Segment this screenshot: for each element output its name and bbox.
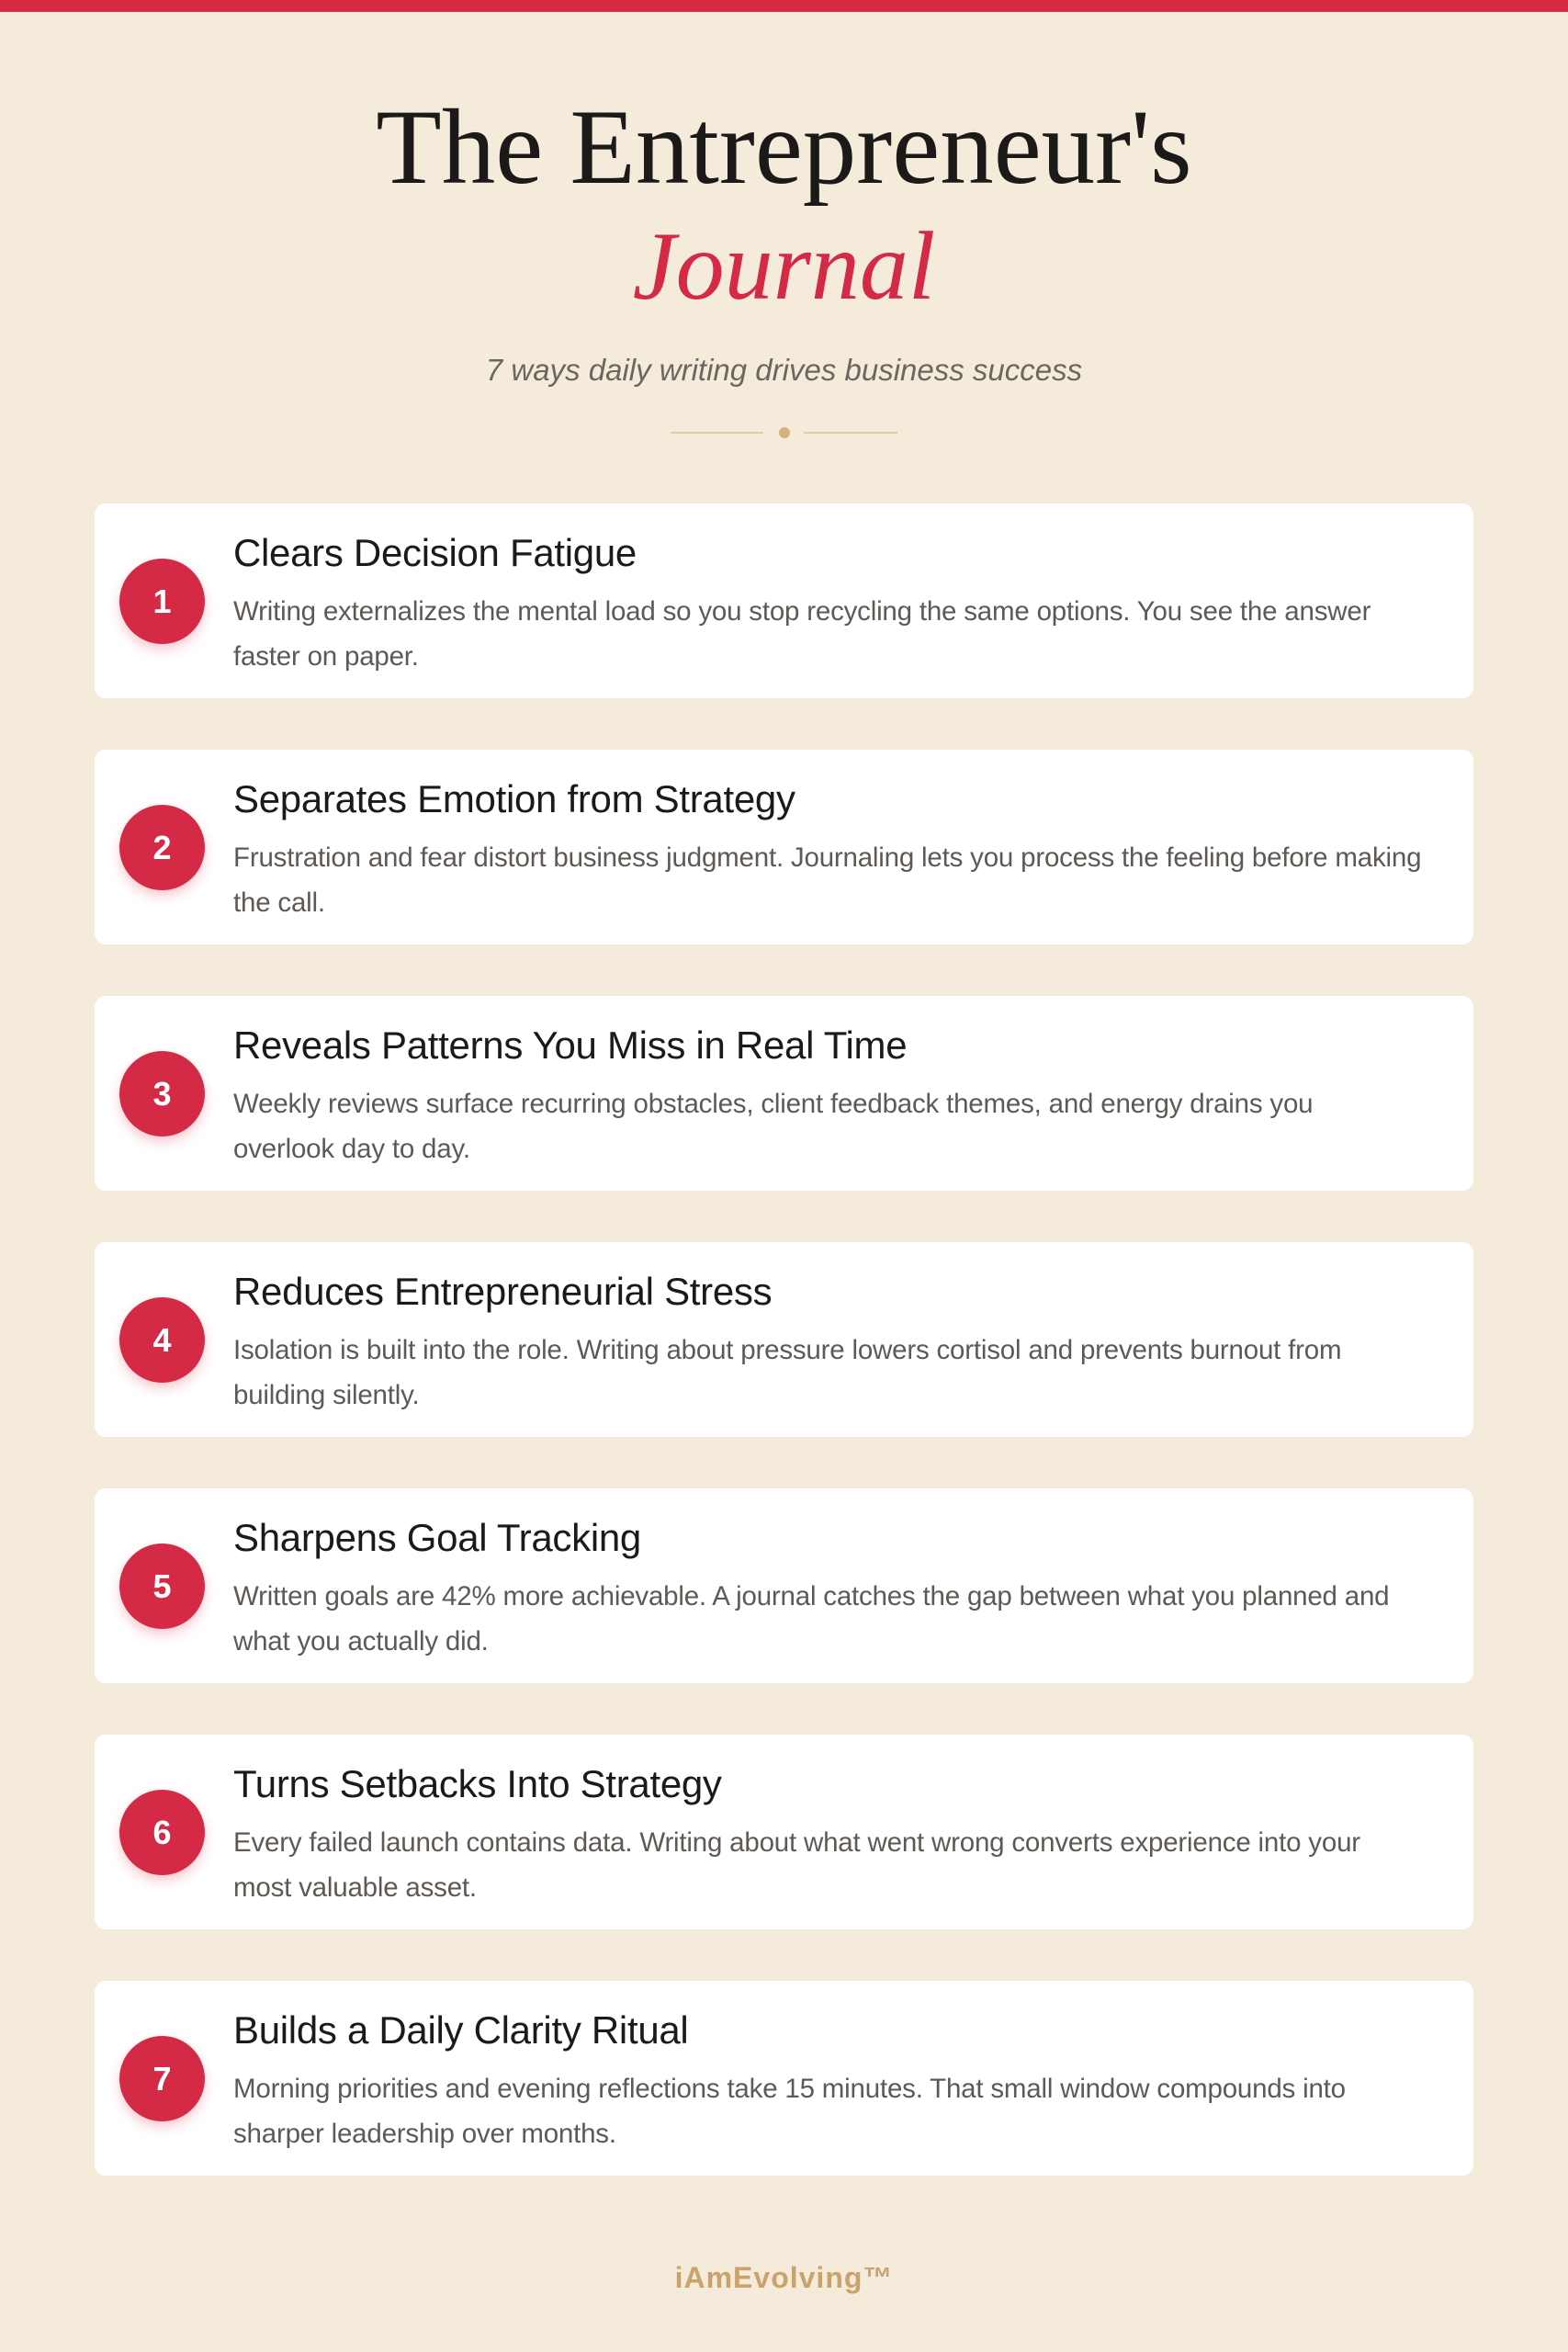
heading 5: Sharpens Goal Tracking: [233, 1516, 641, 1559]
text 5: Written goals are 42% more achievable. A journal catches the gap between what you planned and: [233, 1581, 1389, 1611]
text 2: the call.: [233, 888, 325, 918]
badge 6: [119, 1790, 205, 1875]
heading 7: Builds a Daily Clarity Ritual: [233, 2008, 688, 2052]
card 3: [95, 996, 1473, 1191]
heading 6: Turns Setbacks Into Strategy: [233, 1762, 722, 1805]
heading 1: Clears Decision Fatigue: [233, 531, 637, 574]
text 3: Weekly reviews surface recurring obstacles, client feedback themes, and energy drains you: [233, 1089, 1313, 1119]
badge 5: 5: [152, 1567, 172, 1605]
card 7: [95, 1981, 1473, 2176]
text 1: faster on paper.: [233, 641, 419, 672]
card 5: [95, 1488, 1473, 1683]
badge 5: [119, 1544, 205, 1629]
badge 2: 2: [152, 829, 172, 866]
text 7: sharper leadership over months.: [233, 2119, 616, 2149]
badge 4: [119, 1297, 205, 1383]
badge 6: 6: [152, 1814, 172, 1851]
text 4: Isolation is built into the role. Writing about pressure lowers cortisol and prevents burnout from: [233, 1335, 1341, 1365]
text 4: building silently.: [233, 1380, 419, 1410]
subtitle: 7 ways daily writing drives business success: [486, 353, 1082, 387]
badge 7: [119, 2036, 205, 2121]
badge 2: [119, 805, 205, 890]
heading 3: Reveals Patterns You Miss in Real Time: [233, 1023, 907, 1067]
text 2: [233, 842, 1421, 918]
text 5: what you actually did.: [233, 1626, 489, 1657]
card 4: [95, 1242, 1473, 1437]
badge 4: 4: [152, 1321, 172, 1359]
card 2: [95, 750, 1473, 944]
badge 1: 1: [152, 582, 172, 620]
badge 1: [119, 559, 205, 644]
text 7: [233, 2074, 1346, 2149]
heading 4: Reduces Entrepreneurial Stress: [233, 1270, 772, 1313]
text 3: [233, 1089, 1313, 1164]
text 2: Frustration and fear distort business judgment. Journaling lets you process the feeling before making: [233, 842, 1421, 873]
title: The Entrepreneur's: [376, 88, 1192, 207]
text 6: Every failed launch contains data. Writing about what went wrong converts experience into your: [233, 1827, 1360, 1858]
text 6: most valuable asset.: [233, 1872, 477, 1903]
text 4: [233, 1335, 1341, 1410]
text 1: [233, 596, 1371, 672]
text 7: Morning priorities and evening reflections take 15 minutes. That small window compounds into: [233, 2074, 1346, 2104]
heading 2: Separates Emotion from Strategy: [233, 777, 795, 820]
text 1: Writing externalizes the mental load so you stop recycling the same options. You see the answer: [233, 596, 1371, 627]
text 5: [233, 1581, 1389, 1657]
card 1: [95, 503, 1473, 698]
text 6: [233, 1827, 1360, 1903]
footer brand: iAmEvolving™: [675, 2261, 893, 2294]
title accent: Journal: [633, 212, 935, 320]
badge 3: [119, 1051, 205, 1136]
text 3: overlook day to day.: [233, 1134, 470, 1164]
badge 3: 3: [152, 1075, 172, 1113]
card 6: [95, 1735, 1473, 1929]
badge 7: 7: [152, 2060, 172, 2098]
